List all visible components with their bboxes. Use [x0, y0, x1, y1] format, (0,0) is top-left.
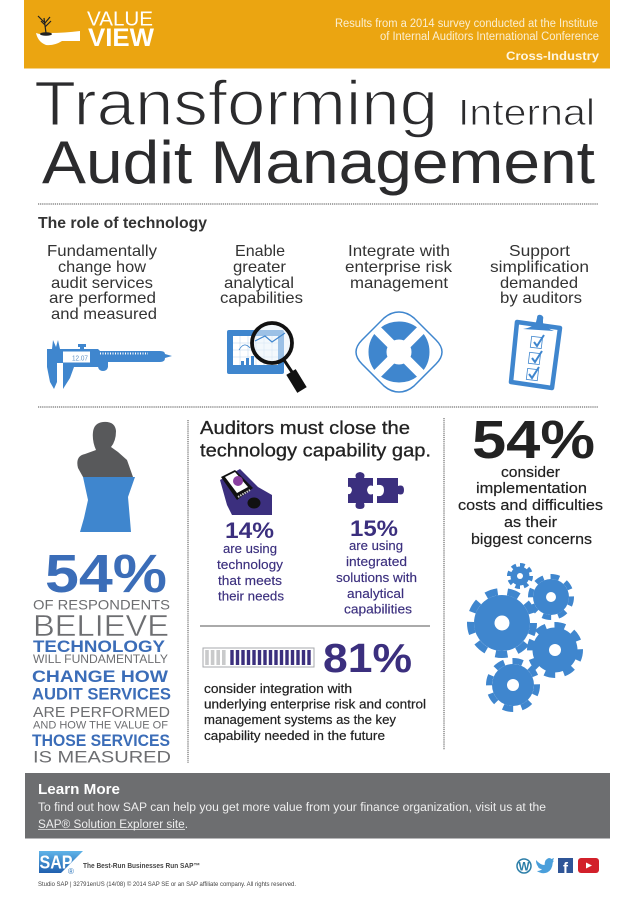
- stat statement: ARE PERFORMED: [33, 704, 170, 721]
- panel: role 3 enterprise risk: [345, 243, 453, 292]
- logo wordmark: value view: VIEW: [88, 24, 154, 52]
- panel: role 2 analytical capabilities: [220, 243, 303, 307]
- panel: role 4 simplification: by auditors: [500, 290, 582, 307]
- logo: SAP: SAP: [40, 852, 72, 872]
- progress bar: 81 percent: [203, 648, 314, 667]
- integration statement: underlying enterprise risk and control: [204, 698, 426, 712]
- concerns statement: [458, 464, 603, 548]
- stat: 15 percent: [336, 516, 417, 616]
- stat: 14 percent: technology: [217, 557, 284, 572]
- panel: role 1 fundamentally change: are performed: [49, 290, 156, 307]
- survey source text: Results from a 2014 survey conducted at the Institute: [335, 18, 598, 30]
- social icons: [517, 858, 599, 877]
- panel: role 4 simplification: Support: [509, 243, 571, 260]
- section heading: the role of technology: The role of technology: [38, 215, 207, 232]
- reading on caliper: 12.07: [72, 354, 88, 362]
- panel: role 3 enterprise risk: Integrate with: [348, 243, 450, 260]
- heading: auditors must close the gap: [200, 417, 431, 460]
- panel: role 4 simplification: [490, 243, 589, 307]
- stat statement: BELIEVE: [33, 608, 169, 643]
- logo wordmark: value view: [87, 8, 154, 52]
- panel: implementation concerns: [458, 410, 603, 709]
- panel: role 1 fundamentally change: change how: [58, 259, 146, 276]
- icon: gears: [470, 565, 580, 709]
- integration statement: [204, 682, 426, 743]
- stat statement: TECHNOLOGY: [33, 638, 165, 656]
- stat: 15 percent: solutions with: [336, 570, 417, 585]
- logo wordmark: value view: VALUE: [87, 8, 153, 30]
- stat: 15 percent: are using: [349, 538, 403, 553]
- icon: hand holding phone: [220, 469, 272, 515]
- icon: caliper: [47, 340, 172, 389]
- title: Transforming: [34, 69, 438, 139]
- footer legal text: Studio SAP | 32791enUS (14/08) © 2014 SAP SE or an SAP affiliate company. All rights reserved.: [38, 881, 296, 888]
- stat: 81 percent: 81%: [323, 635, 412, 681]
- integration statement: management systems as the key: [204, 713, 397, 727]
- header banner: [24, 0, 610, 68]
- stat statement: IS MEASURED: [33, 748, 171, 766]
- survey source text: [335, 18, 599, 43]
- survey source text: of Internal Auditors International Conference: [380, 31, 599, 43]
- panel: role 2 analytical capabilities: capabilities: [220, 290, 303, 307]
- panel: role 1 fundamentally change: [47, 243, 157, 323]
- concerns statement: as their: [504, 514, 557, 531]
- panel: respondents who believe: [32, 422, 171, 766]
- integration statement: capability needed in the future: [204, 729, 385, 743]
- stat statement: [32, 596, 171, 766]
- icon: clipboard checklist: [511, 315, 560, 388]
- panel: role 2 analytical capabilities: Enable: [235, 243, 285, 260]
- stat: 14 percent: that meets: [218, 573, 283, 588]
- stat: 14 percent: their needs: [218, 588, 285, 604]
- icon: puzzle pieces: [348, 472, 404, 509]
- panel: role 1 fundamentally change: Fundamentally: [47, 243, 157, 260]
- panel: role 4 simplification: simplification: [490, 259, 589, 276]
- logo: SAP: ®: [68, 867, 74, 876]
- stat: 15 percent: analytical: [347, 586, 404, 601]
- heading: auditors must close the gap: technology capability gap.: [200, 440, 431, 460]
- panel: learn more: [25, 773, 610, 838]
- stat statement: AND HOW THE VALUE OF: [33, 720, 168, 732]
- icon: wordpress: W: [518, 860, 530, 874]
- icon: person silhouette half filled: [77, 422, 135, 532]
- big stat: 54 percent: 54%: [45, 544, 167, 604]
- stat statement: WILL FUNDAMENTALLY: [33, 654, 168, 666]
- icon: life preserver: [356, 312, 442, 392]
- big stat: 54 percent concerns: 54%: [472, 410, 595, 470]
- icon: youtube: [578, 858, 599, 873]
- panel: role 1 fundamentally change: audit services: [51, 275, 153, 292]
- panel: role 3 enterprise risk: enterprise risk: [345, 259, 453, 276]
- panel: role 2 analytical capabilities: greater: [233, 259, 287, 276]
- concerns statement: consider: [501, 464, 560, 481]
- stat statement: AUDIT SERVICES: [32, 686, 171, 704]
- panel: role 2 analytical capabilities: analytical: [224, 275, 294, 292]
- stat: 14 percent: 14%: [225, 518, 274, 543]
- panel: role 3 enterprise risk: management: [350, 275, 449, 292]
- concerns statement: costs and difficulties: [458, 497, 603, 514]
- title: Internal: [458, 92, 595, 133]
- logo: SAP: [39, 851, 83, 876]
- stat: 15 percent: capabilities: [344, 602, 413, 616]
- title: Audit Management: [42, 129, 595, 196]
- stat: 14 percent: [217, 518, 285, 604]
- icon: magnifying glass over chart: [227, 323, 302, 390]
- stat statement: THOSE SERVICES: [32, 732, 170, 750]
- solution explorer link: SAP® Solution Explorer site.: [38, 817, 188, 831]
- title: [34, 69, 595, 196]
- icon: hand holding seedling: [36, 16, 80, 45]
- tagline: The Best-Run Businesses Run SAP™: [83, 861, 200, 870]
- panel: role 1 fundamentally change: and measured: [51, 306, 157, 323]
- learn more heading: Learn More: [38, 781, 120, 798]
- stat: 14 percent: are using: [223, 541, 277, 556]
- stat: 15 percent: 15%: [350, 516, 398, 541]
- stat statement: OF RESPONDENTS: [33, 596, 170, 612]
- industry label: Cross-Industry: [506, 49, 599, 63]
- icon: facebook: f: [563, 860, 569, 877]
- heading: auditors must close the gap: Auditors must close the: [200, 417, 410, 438]
- stat: 15 percent: integrated: [346, 554, 407, 569]
- panel: role 4 simplification: demanded: [500, 275, 578, 292]
- concerns statement: biggest concerns: [471, 531, 592, 548]
- panel: capability gap: [200, 417, 431, 743]
- concerns statement: implementation: [476, 480, 587, 497]
- stat statement: CHANGE HOW: [32, 668, 168, 686]
- learn more body: To find out how SAP can help you get more value from your finance organization, visit us at the: [38, 800, 546, 814]
- integration statement: consider integration with: [204, 682, 352, 696]
- icon: twitter: [536, 858, 554, 873]
